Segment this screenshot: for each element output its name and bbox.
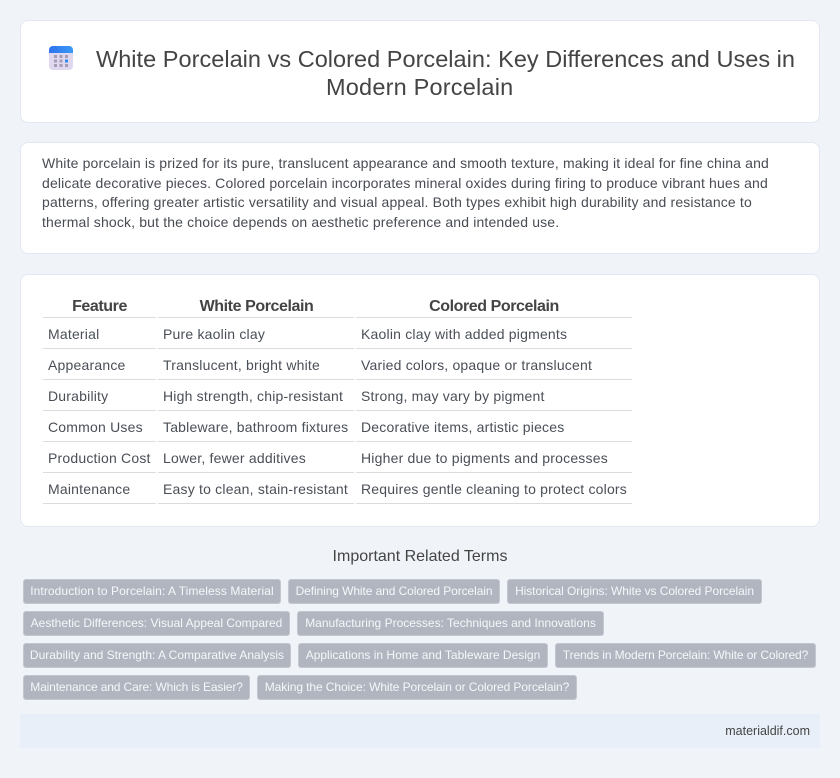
row: appearance: Appearance — [48, 357, 126, 373]
row: appearance: Varied colors, opaque or translucent — [361, 357, 592, 373]
row: durability: Durability — [48, 388, 108, 404]
heading: important related terms: Important Related Terms — [333, 548, 507, 565]
comparison table — [43, 298, 632, 504]
panel: comparison table — [20, 274, 820, 527]
tag: Applications in Home and Tableware Design — [306, 648, 540, 662]
tag: Manufacturing Processes: Techniques and Innovations — [305, 616, 596, 630]
tag — [298, 643, 548, 668]
panel: title header — [20, 20, 820, 123]
tag: Introduction to Porcelain: A Timeless Material — [30, 584, 274, 598]
tag — [507, 579, 762, 604]
row: material: Kaolin clay with added pigments — [361, 326, 567, 342]
tag — [23, 675, 250, 700]
row: maintenance: Maintenance — [48, 481, 130, 497]
row: common uses — [48, 419, 564, 435]
table header: White Porcelain — [200, 298, 313, 315]
table header: Colored Porcelain — [429, 298, 559, 315]
title: White Porcelain vs Colored Porcelain: Key Differences and Uses in — [96, 46, 795, 72]
row: appearance: Translucent, bright white — [163, 357, 320, 373]
row: maintenance — [48, 481, 627, 497]
row: durability: Strong, may vary by pigment — [361, 388, 545, 404]
tag: Aesthetic Differences: Visual Appeal Compared — [31, 616, 282, 630]
intro paragraph: thermal shock, but the choice depends on aesthetic preference and intended use. — [42, 214, 559, 230]
intro paragraph: White porcelain is prized for its pure, translucent appearance and smooth texture, making it ideal for fine china and — [42, 155, 769, 171]
row: common uses: Tableware, bathroom fixtures — [163, 419, 348, 435]
tag — [23, 643, 291, 668]
tag — [297, 611, 604, 636]
tag: Historical Origins: White vs Colored Porcelain — [515, 584, 754, 598]
tag — [555, 643, 816, 668]
row: production cost: Lower, fewer additives — [163, 450, 306, 466]
row: material: Pure kaolin clay — [163, 326, 265, 342]
row: production cost — [48, 450, 608, 466]
row: common uses: Decorative items, artistic pieces — [361, 419, 564, 435]
tag — [23, 579, 281, 604]
row: production cost: Production Cost — [48, 450, 151, 466]
row: material: Material — [48, 326, 99, 342]
tag: Trends in Modern Porcelain: White or Colored? — [563, 648, 808, 662]
row: durability — [48, 388, 545, 404]
row: production cost: Higher due to pigments and processes — [361, 450, 608, 466]
intro paragraph: delicate decorative pieces. Colored porcelain incorporates mineral oxides during firing to produce vibrant hues and — [42, 175, 768, 191]
tag: Maintenance and Care: Which is Easier? — [30, 680, 243, 694]
tag — [257, 675, 577, 700]
tag — [23, 611, 290, 636]
row: durability: High strength, chip-resistant — [163, 388, 343, 404]
tag — [288, 579, 500, 604]
title: Modern Porcelain — [326, 74, 513, 100]
row: common uses: Common Uses — [48, 419, 143, 435]
row: appearance — [48, 357, 592, 373]
title — [96, 46, 795, 100]
row: material — [48, 326, 567, 342]
intro paragraph: patterns, offering greater artistic versatility and visual appeal. Both types exhibit high durability and resistance to — [42, 194, 752, 210]
table header: Feature — [72, 298, 127, 315]
tag: Making the Choice: White Porcelain or Colored Porcelain? — [265, 680, 569, 694]
tag group: related terms — [23, 579, 816, 700]
icon: calendar — [49, 46, 73, 70]
panel: introduction — [20, 142, 820, 254]
tag: Defining White and Colored Porcelain — [296, 584, 492, 598]
tag: Durability and Strength: A Comparative Analysis — [30, 648, 284, 662]
row: maintenance: Easy to clean, stain-resistant — [163, 481, 348, 497]
table header — [72, 298, 559, 315]
footer bar — [20, 714, 820, 748]
row: maintenance: Requires gentle cleaning to protect colors — [361, 481, 627, 497]
intro paragraph — [42, 155, 769, 230]
footer source text: materialdif.com — [725, 724, 810, 738]
